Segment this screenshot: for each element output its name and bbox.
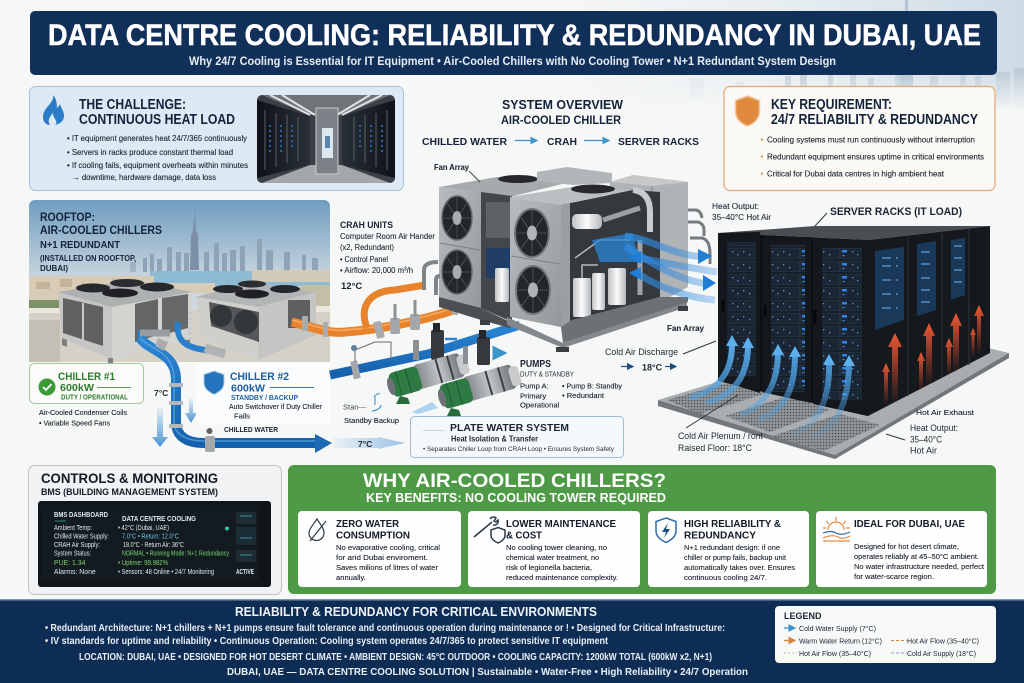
panel: why air-cooled chillers: KEY BENEFITS: NO COOLING TOWER REQUIRED — [366, 491, 666, 505]
label: CRAH units: • Airflow: 20,000 m³/h — [340, 265, 413, 275]
card: zero water: No evaporative cooling, critical — [336, 543, 440, 552]
icon: orange shield — [736, 96, 760, 126]
challenge heading: THE CHALLENGE: — [79, 97, 186, 113]
BMS dashboard screen: 18.0°C - Return Air: 36°C — [123, 541, 184, 549]
rear unit — [439, 167, 612, 328]
challenge heading: CONTINUOUS HEAT LOAD — [79, 112, 235, 128]
label: CRAH units — [340, 220, 435, 292]
title banner — [30, 11, 997, 75]
card: lower maintenance — [468, 511, 640, 587]
blue supply pipe to pumps — [330, 325, 520, 379]
label: cold air plenum — [678, 395, 764, 453]
label: standby backup: Stan--- — [343, 402, 366, 412]
icon: blue shield — [204, 371, 224, 394]
card: lower maintenance: risk of legionella bacteria, — [506, 563, 592, 572]
card: high reliability — [648, 511, 809, 587]
arrows: chilled water flow down — [152, 398, 405, 449]
label: heat output lower: Hot Air — [910, 446, 937, 456]
challenge bullets: • Servers in racks produce constant thermal load — [67, 147, 233, 157]
panel: rooftop air-cooled chillers photo — [29, 200, 330, 363]
main blue chilled water pipe — [140, 338, 332, 453]
BMS dashboard screen: PUE: 1.34 — [54, 560, 86, 567]
BMS dashboard screen: • 42°C (Dubai, UAE) — [118, 524, 169, 532]
card: chiller 2: STANDBY / BACKUP — [231, 395, 298, 402]
card: lower maintenance: reduced maintenance complexity. — [506, 573, 618, 582]
label: pumps: • Redundant — [562, 391, 605, 400]
card: lower maintenance: No cooling tower cleaning, no — [506, 543, 607, 552]
panel: the challenge — [30, 86, 404, 190]
footer band — [0, 599, 1024, 683]
rooftop connecting pipes — [140, 312, 225, 354]
label: pumps: Pump A: — [520, 382, 549, 390]
panel: key requirement — [724, 86, 995, 190]
rack backing — [718, 233, 868, 416]
card: high reliability: chiller or pump fails, backup unit — [684, 553, 787, 562]
BMS dashboard screen: Alarms: None — [54, 569, 96, 576]
rooftop labels: ROOFTOP: — [40, 212, 95, 224]
card: high reliability: continuous cooling 24/7. — [684, 573, 767, 582]
chiller 1 unit — [58, 279, 192, 363]
label: fan array lower: Fan Array — [667, 323, 704, 333]
label: cold air plenum: Cold Air Plenum / ront — [678, 431, 764, 441]
card: chiller 2: 600kW — [231, 382, 265, 394]
label: heat output lower: 35–40°C — [910, 434, 943, 444]
legend: warm water: Warm Water Return (12°C) — [799, 636, 882, 646]
rack side — [868, 226, 990, 416]
legend — [775, 606, 996, 663]
raised floor — [658, 346, 1009, 459]
footer heading: RELIABILITY & REDUNDANCY FOR CRITICAL ENVIRONMENTS — [235, 605, 597, 619]
water — [150, 271, 330, 286]
orange return pipe — [292, 285, 459, 339]
label: cold air discharge: Cold Air Discharge — [605, 347, 678, 357]
right side piping — [688, 210, 710, 264]
BMS dashboard screen: CRAH Air Supply: — [54, 542, 100, 549]
card: zero water: ZERO WATER — [336, 518, 399, 530]
controls heading: CONTROLS & MONITORING — [41, 471, 218, 486]
label: CRAH units: CRAH UNITS — [340, 220, 393, 231]
diagram: pumps — [384, 323, 523, 416]
card: lower maintenance: & COST — [506, 530, 543, 542]
rooftop labels: AIR-COOLED CHILLERS — [40, 225, 162, 237]
hot air arrows — [882, 305, 984, 404]
small left piping — [424, 262, 440, 295]
label: pumps — [520, 359, 622, 410]
BMS dashboard screen — [38, 501, 271, 587]
BMS dashboard screen: Chilled Water Supply: — [54, 534, 109, 540]
card: ideal for Dubai: IDEAL FOR DUBAI, UAE — [854, 518, 965, 530]
BMS dashboard screen: 7.0°C • Return: 12.0°C — [122, 532, 179, 540]
label: pumps: Primary — [520, 392, 546, 400]
card: chiller 1: CHILLER #1 — [58, 371, 115, 383]
pump A — [384, 323, 471, 404]
footer specs: LOCATION: DUBAI, UAE • DESIGNED FOR HOT DESERT CLIMATE • AMBIENT DESIGN: 45°C OUTDOOR • COOLING CAPACITY: 1200kW TOTAL (600kW x2, N+1) — [79, 652, 712, 663]
chiller 1 notes: Air-Cooled Condenser Coils — [39, 408, 127, 417]
card: high reliability: REDUNDANCY — [684, 530, 756, 542]
footer bullets: • IV standards for uptime and reliability • Continuous Operation: Cooling system operates 24/7/365 to protect sensitive IT equipment — [45, 636, 608, 647]
card: zero water — [298, 511, 461, 587]
requirement bullets: Critical for Dubai data centres in high ambient heat — [767, 168, 945, 178]
label: 7C supply: 7°C — [358, 439, 372, 449]
requirement heading: 24/7 RELIABILITY & REDUNDANCY — [771, 112, 978, 128]
label: pumps: PUMPS — [520, 359, 551, 370]
pump B — [435, 330, 523, 416]
side blue glows — [875, 238, 965, 330]
panel: plate water system — [410, 416, 624, 458]
chiller 1 notes: • Variable Speed Fans — [39, 418, 110, 428]
card: zero water: CONSUMPTION — [336, 530, 410, 542]
card: chiller 2: CHILLER #2 — [230, 371, 289, 383]
icon: water drop crossed — [309, 519, 326, 541]
icon: bolt shield — [656, 518, 676, 542]
card: zero water: for arid Dubai enviroment. — [336, 553, 428, 562]
legend: LEGEND — [784, 611, 822, 621]
requirement bullets: Cooling systems must run continuously without interruption — [767, 134, 975, 144]
footer tagline: DUBAI, UAE — DATA CENTRE COOLING SOLUTION | Sustainable • Water-Free • High Reliability • 24/7 Operation — [227, 667, 748, 678]
icon: sun over dunes — [823, 517, 850, 541]
label: fan array top: Fan Array — [434, 162, 469, 172]
label: pumps: Operational — [520, 400, 560, 410]
panel: system overview heading: CHILLED WATER — [422, 136, 507, 148]
subtitle: Why 24/7 Cooling is Essential for IT Equipment • Air-Cooled Chillers with No Cooling Tower • N+1 Redundant System Design — [189, 56, 836, 68]
icon: wrench and shield — [474, 517, 505, 543]
card: ideal for Dubai: No water infrastructure needed, perfect — [854, 562, 985, 571]
panel: why air-cooled chillers — [288, 465, 996, 594]
BMS dashboard screen: DATA CENTRE COOLING — [122, 516, 196, 523]
panel: system overview heading: SYSTEM OVERVIEW — [502, 98, 623, 112]
card: ideal for Dubai: Designed for hot desert climate, — [854, 542, 959, 551]
legend: hot air flow 2: Hot Air Flow (35–40°C) — [799, 649, 871, 658]
roof deck — [29, 310, 330, 362]
card: zero water: annually. — [336, 573, 366, 582]
footer bullets: • Redundant Architecture: N+1 chillers + N+1 pumps ensure fault tolerance and continuous operation during maintenance or ! • Designed for Critical Infrastructure: — [45, 623, 725, 634]
card: chiller 1 — [30, 364, 144, 404]
legend: hot air flow: Hot Air Flow (35–40°C) — [907, 636, 979, 646]
cold air arrows — [690, 345, 849, 437]
why heading: WHY AIR-COOLED CHILLERS? — [363, 470, 666, 492]
panel: plate water system: Heat Isolation & Transfer — [451, 434, 538, 444]
requirement bullets: Redundant equipment ensures uptime in critical environments — [767, 152, 984, 162]
BMS dashboard screen: • Uptime: 99.982% — [118, 560, 168, 567]
airflow arrows between CRAH and racks — [592, 233, 717, 300]
legend: cold water: Cold Water Supply (7°C) — [799, 624, 876, 633]
card: chiller 1: DUTY / OPERATIONAL — [61, 394, 129, 402]
card: chiller 2: Fails — [234, 412, 250, 420]
label: server racks — [815, 206, 962, 226]
label: server racks: SERVER RACKS (IT LOAD) — [830, 206, 962, 218]
BMS dashboard screen: Ambient Temp: — [54, 525, 92, 532]
BMS dashboard screen: NORMAL • Running Mode: N+1 Redundancy — [122, 550, 229, 558]
icon: flame — [43, 95, 64, 125]
skid base — [507, 302, 687, 348]
card: chiller 2 — [196, 363, 330, 425]
BMS dashboard screen: ACTIVE — [236, 569, 254, 576]
challenge bullets: • If cooling fails, equipment overheats within minutes — [67, 160, 248, 170]
image: server aisle — [257, 95, 395, 183]
requirement bullets — [761, 134, 984, 178]
diagram: CRAH chiller units — [424, 167, 710, 352]
label: pumps: • Pump B: Standby — [562, 382, 622, 390]
right cabinet — [610, 175, 688, 297]
rooftop labels: DUBAI) — [40, 264, 68, 273]
label: chilled water: CHILLED WATER — [224, 425, 279, 434]
label: heat output lower — [886, 423, 958, 456]
server racks — [690, 226, 990, 437]
card: high reliability: N+1 redundant design: if one — [684, 543, 780, 552]
BMS dashboard screen: • Sensors: 48 Online • 24/7 Monitoring — [118, 569, 214, 576]
challenge bullets: • IT equipment generates heat 24/7/365 continuously — [67, 133, 248, 143]
card: chiller 1: 600kW — [60, 382, 94, 394]
chiller 2 unit — [196, 280, 316, 360]
card: chiller 2: Auto Switchover if Duty Chiller — [229, 402, 322, 411]
label: CRAH units: 12°C — [341, 281, 362, 292]
label: cold air discharge — [605, 341, 716, 372]
label: CRAH units: • Control Panel — [340, 254, 388, 264]
rack top — [718, 226, 990, 240]
card: ideal for Dubai: for water-scarce region. — [854, 572, 934, 581]
BMS dashboard screen: BMS DASHBOARD — [54, 512, 108, 519]
rooftop labels: N+1 REDUNDANT — [40, 240, 120, 251]
skyline with tower — [130, 209, 318, 272]
panel: system overview heading: SERVER RACKS — [618, 136, 699, 148]
card: high reliability: HIGH RELIABILITY & — [684, 518, 781, 530]
legend: cold air supply: Cold Air Supply (18°C) — [907, 649, 976, 658]
BMS dashboard screen: System Status: — [54, 550, 91, 558]
label: hot air exhaust: Hot Air Exhaust — [916, 408, 975, 417]
panel: plate water system: PLATE WATER SYSTEM — [450, 423, 569, 434]
label: cold air discharge: 18°C — [642, 362, 663, 372]
card: zero water: Saves milions of litres of water — [336, 563, 438, 572]
panel: system overview heading: AIR-COOLED CHILLER — [501, 113, 621, 127]
label: heat output top: Heat Output: — [712, 201, 759, 211]
label: CRAH units: Computer Room Air Hander — [340, 231, 435, 241]
label: 7C rooftop: 7°C — [154, 388, 168, 398]
label: heat output lower: Heat Output: — [910, 423, 958, 433]
low-rise district — [29, 270, 330, 312]
label: pumps: DUTY & STANDBY — [520, 372, 574, 378]
rooftop labels — [40, 212, 162, 273]
card: ideal for Dubai: operates reliably at 45–50°C ambient. — [854, 552, 979, 561]
rooftop labels: (INSTALLED ON ROOFTOP, — [40, 254, 136, 263]
card: lower maintenance: LOWER MAINTENANCE — [506, 518, 616, 530]
panel: controls and monitoring: BMS (BUILDING MANAGEMENT SYSTEM) — [41, 487, 218, 498]
panel: controls and monitoring — [28, 466, 282, 594]
challenge bullets: → downtime, hardware damage, data loss — [72, 172, 216, 182]
label: standby backup: Standby Backup — [344, 416, 399, 425]
card: high reliability: automatically takes over. Ensures — [684, 563, 795, 572]
background: Dubai skyline haze — [560, 0, 1024, 112]
panel: plate water system: • Separates Chiller Loop from CRAH Loop • Ensures System Safety — [423, 446, 615, 453]
label: cold air plenum: Raised Floor: 18°C — [678, 443, 753, 453]
label: heat output top: 35–40°C Hot Air — [712, 212, 771, 222]
panel: system overview heading: CRAH — [547, 136, 577, 148]
label: standby backup — [343, 394, 399, 425]
label: fan array top — [434, 162, 480, 182]
machinery interior — [561, 190, 660, 327]
label: CRAH units: (x2, Redundant) — [340, 242, 394, 252]
card: lower maintenance: chemical water treatment, no — [506, 553, 599, 562]
rack fronts — [718, 232, 760, 393]
requirement heading: KEY REQUIREMENT: — [771, 97, 892, 113]
icon: green check — [38, 378, 56, 396]
panel: system overview heading — [422, 98, 699, 148]
front unit — [510, 187, 630, 205]
card: ideal for Dubai — [816, 511, 987, 587]
